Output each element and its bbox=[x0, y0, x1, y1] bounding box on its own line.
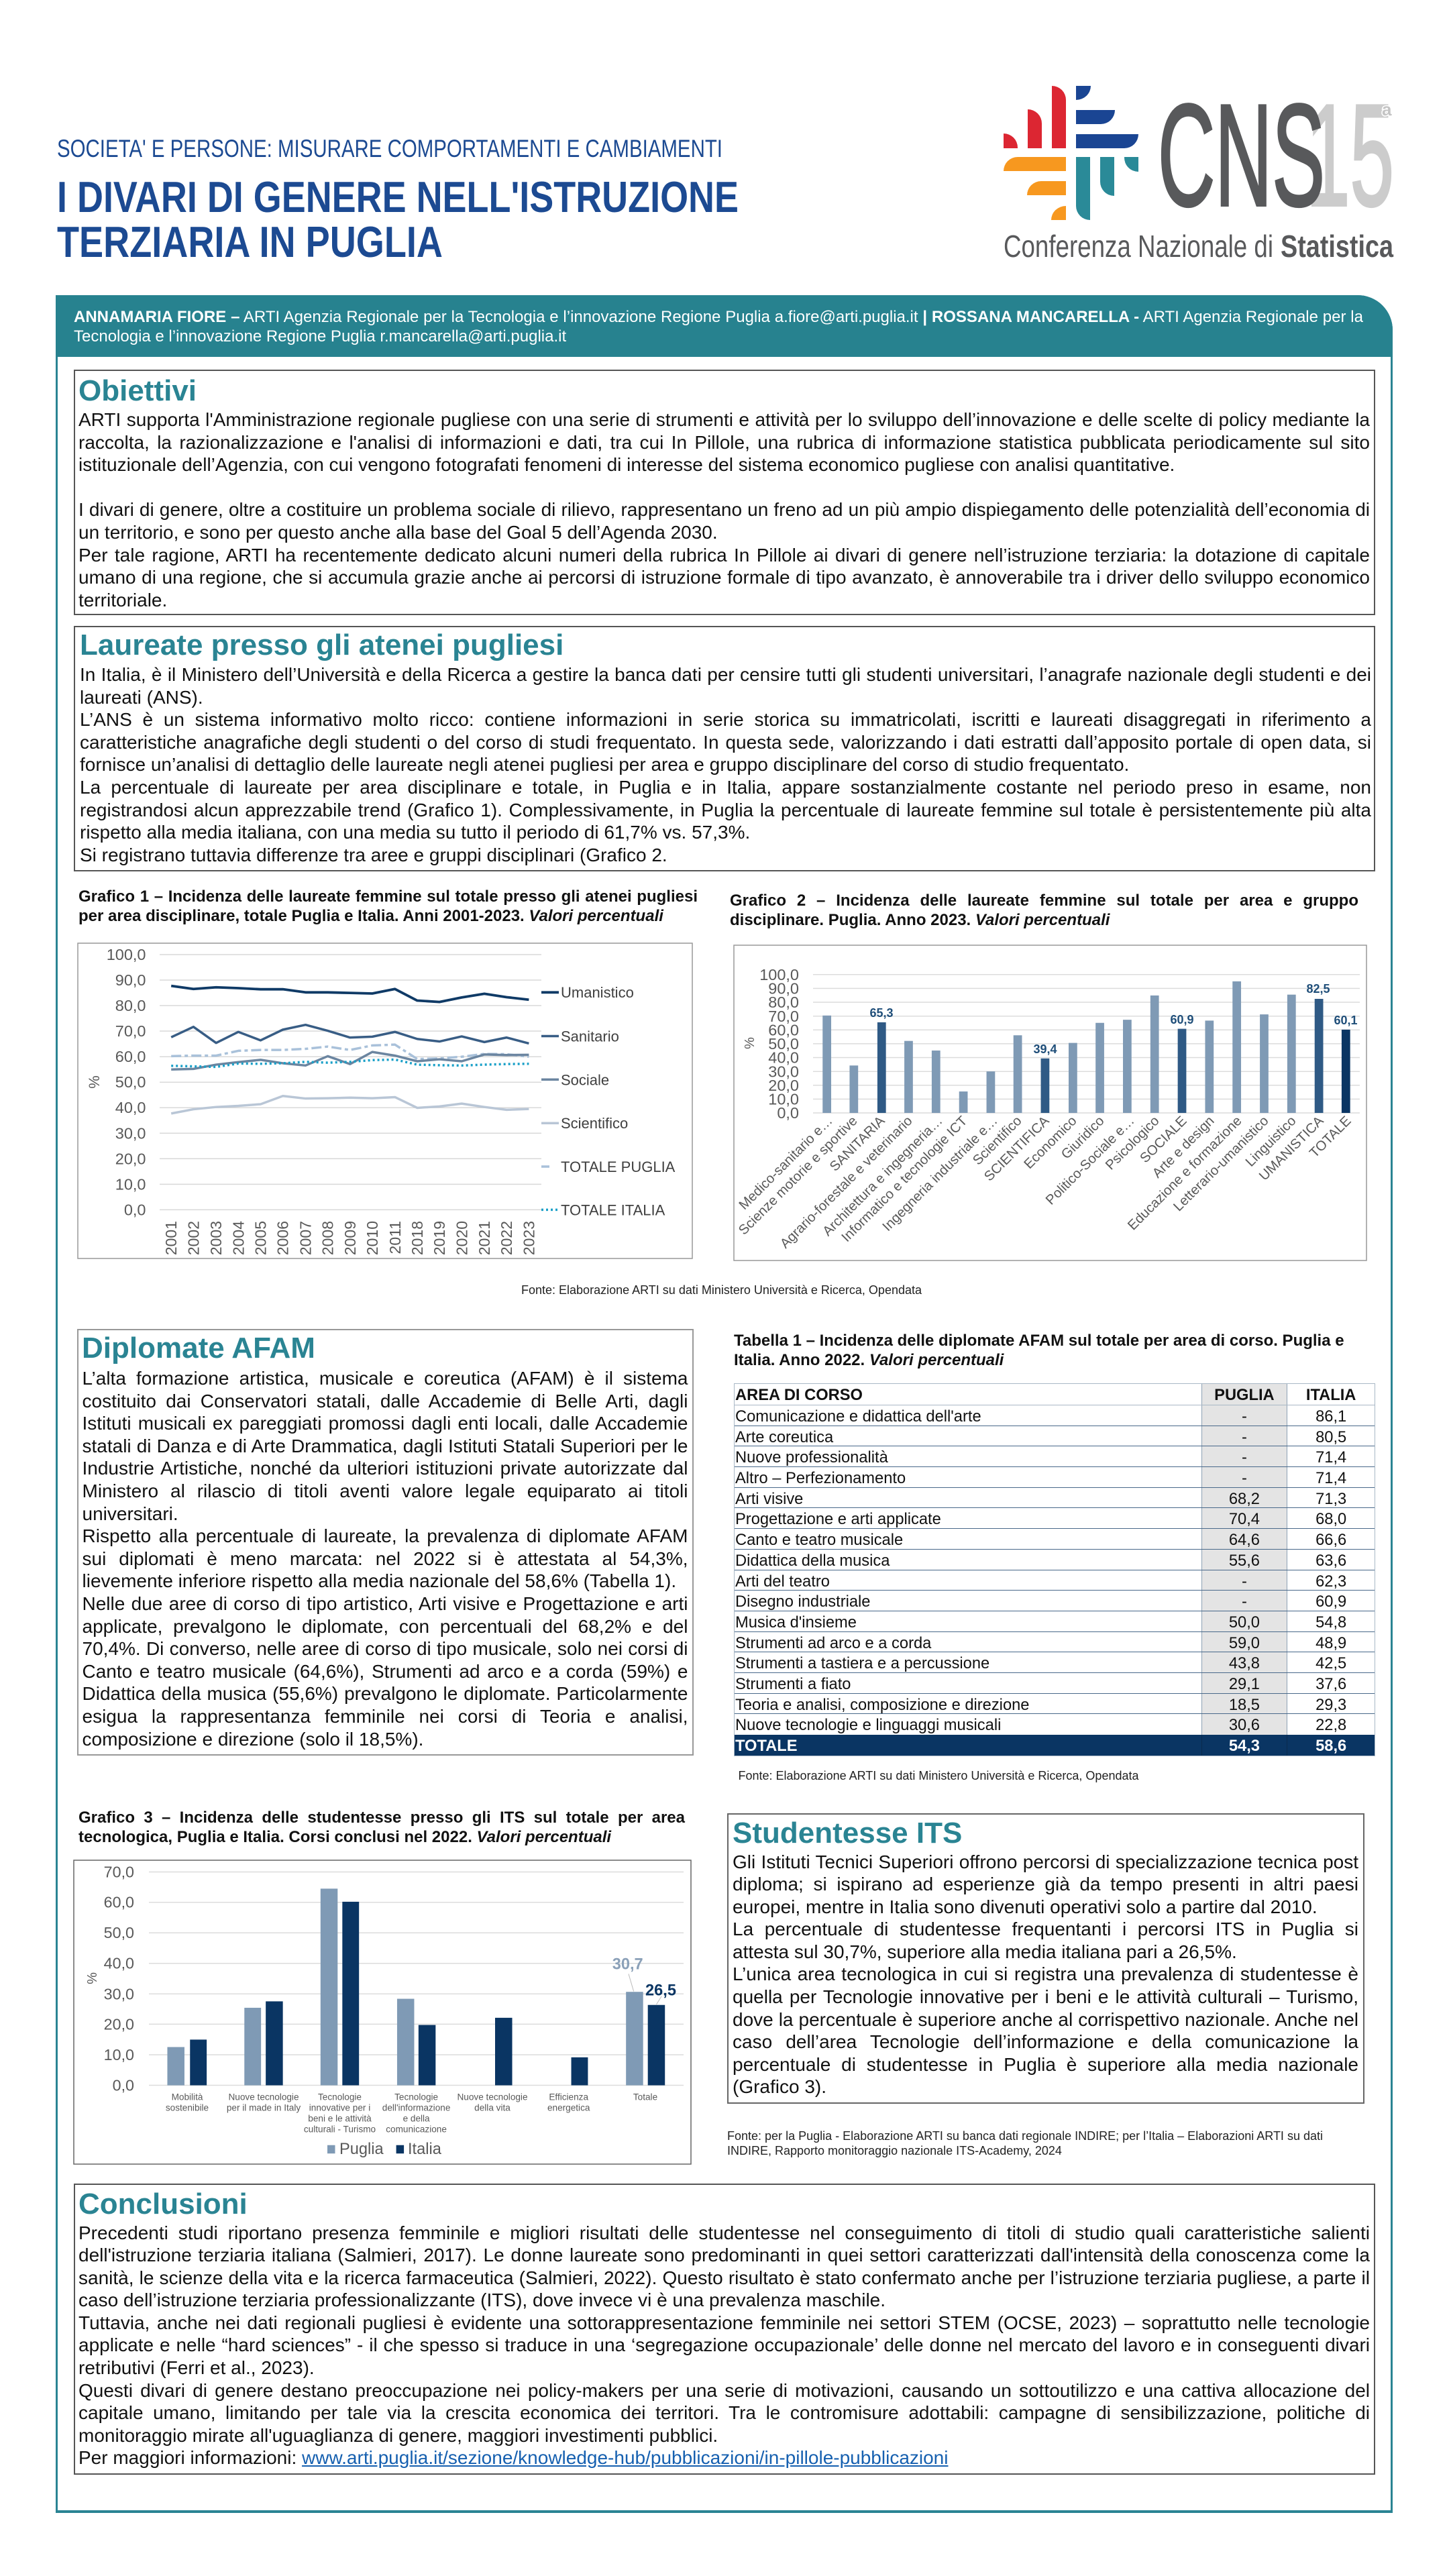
table title: Tabella 1 bbox=[734, 1332, 1344, 1369]
text: Conclusioni body: applicate e nelle “hard sciences” - il che spesso si traduce in una ‘segregazione occupazionale’ delle donne nel mercato del lavoro e in conseguenti divari bbox=[78, 2334, 1370, 2355]
table: Tabella 1: 60,9 bbox=[1316, 1593, 1346, 1611]
main title bbox=[57, 172, 739, 266]
y axis labels: 40,0 bbox=[104, 1955, 134, 1972]
table: Tabella 1: 64,6 bbox=[1229, 1532, 1260, 1549]
y axis labels: 50,0 bbox=[115, 1073, 146, 1091]
table: Tabella 1: 68,2 bbox=[1229, 1491, 1260, 1508]
x axis years: 2021 bbox=[476, 1221, 493, 1255]
text: AFAM body: Didattica della musica (55,6%) prevalgono le diplomate. Particolarmente bbox=[82, 1683, 688, 1704]
text: Conclusioni body: monitoraggio mirate all'uguaglianza di genere, maggiori investimenti pubblici. bbox=[78, 2425, 718, 2446]
chart title: Grafico 2: disciplinare. Puglia. Anno 2023. Valori percentuali bbox=[730, 911, 1110, 929]
x axis category labels: Agrario-forestale e veterinario bbox=[777, 1114, 916, 1251]
x axis category labels: Ingegneria industriale e… bbox=[880, 1114, 1001, 1234]
table: Tabella 1: ITALIA bbox=[1306, 1387, 1356, 1404]
text: AFAM body: lievemente inferiore rispetto alla media nazionale del 58,6% (Tabella 1). bbox=[82, 1570, 676, 1591]
table: Tabella 1: 29,3 bbox=[1316, 1697, 1346, 1714]
icon: blue bars bbox=[1076, 86, 1138, 148]
table: Tabella 1: Strumenti a fiato bbox=[735, 1676, 851, 1693]
chart title: Grafico 1: Grafico 1 – Incidenza delle laureate femmine sul totale presso gli atenei pugliesi bbox=[78, 888, 698, 906]
x axis category labels: Efficienza bbox=[549, 2092, 588, 2102]
text: Obiettivi body: raccolta, la razionalizzazione e l'analisi di informazioni e dati, tra cui In Pillole, una rubrica di informazione statistica pubblicata periodicamente sul sito bbox=[78, 432, 1370, 453]
heading: Studentesse ITS: Studentesse ITS bbox=[733, 1817, 962, 1849]
chart: Grafico 3 grouped bar chart: 26,5 bbox=[645, 1982, 676, 2000]
table: Tabella 1: 54,8 bbox=[1316, 1614, 1346, 1631]
table: Tabella 1: - bbox=[1242, 1593, 1247, 1611]
x axis category labels: Tecnologie bbox=[394, 2092, 438, 2102]
y axis labels: 50,0 bbox=[104, 1924, 134, 1941]
legend: TOTALE PUGLIA bbox=[561, 1159, 676, 1175]
x axis years: 2022 bbox=[498, 1221, 515, 1255]
logo caption: Conferenza Nazionale di bbox=[1004, 229, 1273, 264]
x axis category labels: Medico-sanitario e… bbox=[737, 1114, 836, 1213]
text: ITS body: caso dell’area Tecnologie dell’informazione e della comunicazione la bbox=[733, 2031, 1358, 2052]
x axis category labels: e della bbox=[403, 2114, 430, 2124]
text: AFAM body: sui diplomati è meno marcata: nel 2022 si è attestata al 54,3%, bbox=[82, 1548, 688, 1569]
y axis labels: 80,0 bbox=[115, 997, 146, 1014]
table: Tabella 1: 66,6 bbox=[1316, 1532, 1346, 1549]
x axis years: 2002 bbox=[184, 1221, 202, 1255]
text: ITS body bbox=[733, 1851, 1358, 2097]
y axis labels: 60,0 bbox=[104, 1894, 134, 1911]
x axis category labels: dell'informazione bbox=[382, 2103, 450, 2113]
table: Tabella 1: Nuove tecnologie e linguaggi musicali bbox=[735, 1717, 1001, 1734]
table: Tabella 1: - bbox=[1242, 1408, 1247, 1426]
table: Tabella 1: 71,4 bbox=[1316, 1470, 1346, 1487]
x axis category labels: Totale bbox=[633, 2092, 657, 2102]
text: Obiettivi body: Per tale ragione, ARTI ha recentemente dedicato alcuni numeri della rubrica In Pillole ai divari di genere nell’istruzione terziaria: la dotazione di capitale bbox=[78, 545, 1370, 566]
x axis category labels: Tecnologie bbox=[318, 2092, 362, 2102]
table: Tabella 1: 70,4 bbox=[1229, 1511, 1260, 1528]
value labels: 30,7 bbox=[612, 1956, 643, 1974]
chart: Grafico 3 grouped bar chart bbox=[73, 1860, 692, 2165]
table: Tabella 1: Strumenti ad arco e a corda bbox=[735, 1635, 931, 1652]
main title: TERZIARIA IN PUGLIA bbox=[57, 217, 443, 266]
text: Conclusioni body: capitale umano, limitando per tale via la crescita economica dei territori. Tra le contromisure adottabili: campagne di sensibilizzazione, politiche di bbox=[78, 2402, 1370, 2423]
text: Obiettivi body: istituzionale dell’Agenzia, con cui vengono fotografati fenomeni di interesse del sistema economico pugliese con analisi quantitative. bbox=[78, 454, 1175, 475]
x axis category labels: innovative per i bbox=[309, 2103, 370, 2113]
chart title: Grafico 1: per area disciplinare, totale Puglia e Italia. Anni 2001-2023. Valori percentuali bbox=[78, 907, 663, 925]
text: Laureate body: fornisce un’analisi di dettaglio delle laureate negli atenei pugliesi per area e gruppo disciplinare del corso di studio frequentato. bbox=[80, 754, 1129, 775]
table: Tabella 1 bbox=[734, 1383, 1375, 1756]
logo: CNS 15a Conferenza Nazionale di Statistica bbox=[1004, 74, 1394, 264]
text: Obiettivi body: umano di una regione, che si accumula grazie anche ai percorsi di istruzione formale di tipo avanzato, è annoverabile tra i driver dello sviluppo economico bbox=[78, 567, 1370, 588]
text: Laureate body: laureati (ANS). bbox=[80, 687, 203, 708]
y axis labels: 10,0 bbox=[768, 1091, 799, 1108]
text: ITS body: quella per Tecnologie innovative per i beni e le attività culturali – Turismo, bbox=[733, 1986, 1358, 2007]
value labels: 60,9 bbox=[1170, 1013, 1194, 1026]
table: Tabella 1: Arti del teatro bbox=[735, 1572, 830, 1590]
bars bbox=[822, 981, 1350, 1113]
x axis years: 2018 bbox=[409, 1221, 426, 1255]
text: AFAM body: composizione e direzione (solo il 18,5%). bbox=[82, 1728, 423, 1750]
y axis labels: 30,0 bbox=[104, 1985, 134, 2002]
y axis labels: 20,0 bbox=[768, 1077, 799, 1094]
table: Tabella 1: 62,3 bbox=[1316, 1572, 1346, 1590]
chart title: Grafico 3 bbox=[78, 1809, 686, 1846]
chart title: Grafico 1 bbox=[78, 888, 698, 925]
y axis unit: % bbox=[86, 1075, 103, 1089]
text: Conclusioni body: caso dell’istruzione terziaria professionalizzante (ITS), dove invece vi è una prevalenza maschile. bbox=[78, 2290, 885, 2310]
text: Obiettivi body bbox=[78, 409, 1370, 610]
y axis labels: 20,0 bbox=[115, 1150, 146, 1167]
legend: Sanitario bbox=[561, 1028, 619, 1045]
legend: Umanistico bbox=[561, 984, 634, 1001]
table: Tabella 1: 63,6 bbox=[1316, 1552, 1346, 1570]
y axis unit: % bbox=[85, 1972, 100, 1984]
data lines bbox=[171, 986, 529, 1114]
icon: orange bars bbox=[1004, 157, 1066, 220]
text: Laureate body: registrandosi alcun apprezzabile trend (Grafico 1). Complessivamente, in Puglia la percentuale di laureate femmine sul totale è persistentemente più alta bbox=[80, 800, 1371, 820]
x axis category labels: SCIENTIFICA bbox=[981, 1114, 1053, 1184]
panel: Conclusioni bbox=[74, 2184, 1375, 2475]
icon: teal bars bbox=[1076, 157, 1138, 220]
table: Tabella 1: - bbox=[1242, 1572, 1247, 1590]
source note: Grafici 1 e 2: Fonte: Elaborazione ARTI su dati Ministero Università e Ricerca, Opendata bbox=[521, 1283, 922, 1297]
y axis labels: 100,0 bbox=[759, 966, 799, 983]
x axis category labels: Linguistico bbox=[1243, 1114, 1299, 1170]
table: Tabella 1: 80,5 bbox=[1316, 1429, 1346, 1446]
y axis labels: 70,0 bbox=[104, 1864, 134, 1881]
x axis years: 2001 bbox=[162, 1221, 180, 1255]
x axis category labels bbox=[166, 2092, 657, 2135]
table: Tabella 1: 30,6 bbox=[1229, 1717, 1260, 1734]
heading: Laureate: Laureate presso gli atenei pugliesi bbox=[80, 629, 564, 661]
authors line 1: ANNAMARIA FIORE – ARTI Agenzia Regionale per la Tecnologia e l’innovazione Regione Puglia a.fiore@arti.puglia.it | ROSSANA MANCARELLA - ARTI Agenzia Regionale per la bbox=[74, 308, 1363, 326]
y axis labels: 70,0 bbox=[115, 1022, 146, 1040]
content frame bbox=[56, 295, 1393, 2513]
x axis category labels: Mobilità bbox=[172, 2092, 203, 2102]
panel: Laureate presso gli atenei pugliesi bbox=[74, 626, 1375, 871]
text: AFAM body: Canto e teatro musicale (64,6%), Strumenti ad arco e a corda (59%) e bbox=[82, 1661, 688, 1682]
y axis labels bbox=[104, 1864, 134, 2094]
text: AFAM body: Istituti musicali ex pareggiati promossi dagli enti locali, dalle Accademie bbox=[82, 1413, 688, 1434]
y axis labels: 40,0 bbox=[768, 1049, 799, 1067]
text: Obiettivi body: I divari di genere, oltre a costituire un problema sociale di rilievo, rappresentano un freno ad un più ampio dispiegamento delle potenzialità dell’economia di bbox=[78, 499, 1370, 520]
logo caption: Statistica bbox=[1281, 229, 1393, 264]
authors band bbox=[56, 295, 1393, 357]
text: Conclusioni body: retributivi (Ferri et al., 2023). bbox=[78, 2357, 315, 2378]
y axis labels: 30,0 bbox=[768, 1063, 799, 1080]
y axis unit: % bbox=[743, 1037, 757, 1049]
y axis labels bbox=[107, 946, 146, 1218]
text: Laureate body: caratteristiche anagrafiche degli studenti o del corso di studi frequentato. In questa sede, valorizzando i dati estratti dall’apposito portale di open data, si bbox=[80, 732, 1371, 753]
x axis years: 2019 bbox=[431, 1221, 448, 1255]
authors line 2: Tecnologia e l’innovazione Regione Puglia r.mancarella@arti.puglia.it bbox=[74, 327, 566, 345]
text: ITS body: dove la percentuale è superiore anche al corrispettivo nazionale. Anche nel bbox=[733, 2009, 1358, 2030]
x axis years: 2004 bbox=[229, 1221, 247, 1255]
text: AFAM body: 70,4%. Di converso, nelle aree di corso di tipo musicale, solo nei corsi di bbox=[82, 1638, 688, 1659]
legend: TOTALE ITALIA bbox=[561, 1201, 665, 1218]
x axis years: 2023 bbox=[520, 1221, 537, 1255]
table: Tabella 1: Didattica della musica bbox=[735, 1552, 890, 1570]
table: Tabella 1: - bbox=[1242, 1470, 1247, 1487]
table: Tabella 1: 22,8 bbox=[1316, 1717, 1346, 1734]
x axis years: 2007 bbox=[297, 1221, 314, 1255]
text: Conclusioni body bbox=[78, 2222, 1370, 2468]
value labels: 60,1 bbox=[1334, 1014, 1358, 1027]
y axis labels: 10,0 bbox=[104, 2046, 134, 2063]
table: Tabella 1: - bbox=[1242, 1449, 1247, 1466]
x axis category labels: Arte e design bbox=[1150, 1114, 1218, 1181]
table: Tabella 1: 18,5 bbox=[1229, 1697, 1260, 1714]
heading: Obiettivi: Obiettivi bbox=[78, 374, 197, 407]
x axis category labels: Scienze motorie e sportive bbox=[736, 1114, 861, 1238]
x axis years: 2011 bbox=[386, 1221, 404, 1254]
table: Tabella 1: 48,9 bbox=[1316, 1635, 1346, 1652]
table: Tabella 1: Arti visive bbox=[735, 1491, 803, 1508]
session subtitle: SOCIETA' E PERSONE: MISURARE COMPORTAMENTI E CAMBIAMENTI bbox=[57, 135, 722, 162]
source note: Grafico 3: INDIRE, Rapporto monitoraggio nazionale ITS-Academy, 2024 bbox=[727, 2144, 1062, 2157]
legend: Sociale bbox=[561, 1071, 609, 1088]
x axis category labels: TOTALE bbox=[1307, 1114, 1354, 1161]
text: ITS body: europei, mentre in Italia sono divenuti operativi solo a partire dal 2010. bbox=[733, 1896, 1318, 1917]
x axis category labels: Politico-Sociale e… bbox=[1043, 1114, 1138, 1208]
x axis category labels: culturali - Turismo bbox=[304, 2125, 376, 2135]
text: ITS body: diploma; si ispirano ad esperienze già da tempo presenti in altri paesi bbox=[733, 1874, 1358, 1894]
panel: Diplomate AFAM bbox=[77, 1329, 694, 1756]
chart title: Grafico 3: Grafico 3 – Incidenza delle studentesse presso gli ITS sul totale per area bbox=[78, 1809, 685, 1827]
chart title: Grafico 2: Grafico 2 – Incidenza delle laureate femmine sul totale per area e gruppo bbox=[730, 892, 1358, 910]
y axis labels: 10,0 bbox=[115, 1175, 146, 1193]
value labels: 65,3 bbox=[869, 1006, 894, 1020]
x axis years: 2006 bbox=[274, 1221, 292, 1255]
legend bbox=[541, 984, 676, 1218]
text: Laureate body bbox=[80, 664, 1371, 865]
table: Tabella 1: 50,0 bbox=[1229, 1614, 1260, 1631]
x axis years bbox=[162, 1221, 537, 1255]
value labels bbox=[869, 982, 1358, 1056]
y axis labels: 60,0 bbox=[768, 1021, 799, 1038]
y axis labels: 40,0 bbox=[115, 1099, 146, 1116]
table: Tabella 1: 86,1 bbox=[1316, 1408, 1346, 1426]
y axis labels: 70,0 bbox=[768, 1008, 799, 1025]
table: Tabella 1: Musica d'insieme bbox=[735, 1614, 857, 1631]
y axis labels: 100,0 bbox=[107, 946, 146, 963]
table: Tabella 1: 42,5 bbox=[1316, 1655, 1346, 1672]
y axis labels: 0,0 bbox=[777, 1104, 799, 1122]
chart title: Grafico 2 bbox=[730, 892, 1358, 929]
text: Laureate body: rispetto alla media italiana, con una media su tutto il periodo di 61,7% vs. 57,3%. bbox=[80, 822, 750, 843]
text: ITS body: La percentuale di studentesse frequentanti i percorsi ITS in Puglia si bbox=[733, 1919, 1358, 1939]
text: AFAM body: universitari. bbox=[82, 1503, 178, 1524]
table: Tabella 1: TOTALE bbox=[735, 1737, 798, 1755]
text: ITS body: percentuale di studentesse in Puglia è superiore alla media nazionale bbox=[733, 2054, 1358, 2075]
text: Conclusioni body: sanità, le scienze della vita e la ricerca farmaceutica (Salmieri, 2022). Questo risultato è stato confermato anche per l’istruzione terziaria pugliese, a parte il bbox=[78, 2267, 1370, 2288]
table: Tabella 1: 29,1 bbox=[1229, 1676, 1260, 1693]
text: AFAM body: esigua la rappresentanza femminile nei corsi di Teoria e analisi, bbox=[82, 1706, 688, 1727]
text: Laureate body: L’ANS è un sistema informativo molto ricco: contiene informazioni in serie storica su immatricolati, iscritti e laureati disaggregati in riferimento a bbox=[80, 709, 1371, 730]
table: Tabella 1: PUGLIA bbox=[1214, 1387, 1275, 1404]
legend: Italia bbox=[408, 2141, 442, 2158]
text: AFAM body: L’alta formazione artistica, musicale e coreutica (AFAM) è il sistema bbox=[82, 1368, 688, 1389]
table: Tabella 1: - bbox=[1242, 1429, 1247, 1446]
x axis years: 2010 bbox=[364, 1221, 381, 1255]
x axis category labels: comunicazione bbox=[386, 2125, 447, 2135]
text: Conclusioni body: Precedenti studi riportano presenza femminile e migliori risultati delle studentesse nel conseguimento di titoli di studio quali caratteristiche salienti bbox=[78, 2222, 1370, 2243]
x axis years: 2003 bbox=[207, 1221, 225, 1255]
text: Laureate body: Si registrano tuttavia differenze tra aree e gruppi disciplinari (Grafico 2. bbox=[80, 845, 667, 865]
text: ITS body: Gli Istituti Tecnici Superiori offrono percorsi di specializzazione tecnica post bbox=[733, 1851, 1358, 1872]
x axis years: 2008 bbox=[319, 1221, 337, 1255]
x axis category labels: Scientifico bbox=[970, 1114, 1025, 1168]
legend bbox=[327, 2141, 442, 2158]
table: Tabella 1: 71,3 bbox=[1316, 1491, 1346, 1508]
text: Obiettivi body: territoriale. bbox=[78, 590, 167, 610]
table: Tabella 1: Nuove professionalità bbox=[735, 1449, 888, 1466]
text: Obiettivi body: un territorio, e sono per questo anche alla base del Goal 5 dell’Agenda 2030. bbox=[78, 522, 718, 543]
chart: Grafico 2 bar chart bbox=[733, 945, 1367, 1261]
y axis labels: 0,0 bbox=[113, 2077, 134, 2094]
panel: Obiettivi bbox=[74, 370, 1375, 615]
icon: red bars bbox=[1004, 86, 1066, 148]
table: Tabella 1: 58,6 bbox=[1316, 1737, 1346, 1755]
heading: Diplomate AFAM: Diplomate AFAM bbox=[82, 1332, 315, 1364]
x axis category labels: Nuove tecnologie bbox=[228, 2092, 299, 2102]
y axis labels bbox=[759, 966, 799, 1122]
heading: Conclusioni: Conclusioni bbox=[78, 2187, 248, 2220]
x axis category labels: SANITARIA bbox=[827, 1114, 888, 1175]
x axis years: 2020 bbox=[453, 1221, 470, 1255]
x axis category labels: UMANISTICA bbox=[1256, 1114, 1327, 1183]
table: Tabella 1: Canto e teatro musicale bbox=[735, 1532, 903, 1549]
value labels: 82,5 bbox=[1306, 982, 1330, 996]
text: ITS body: L’unica area tecnologica in cui si registra una prevalenza di studentesse è bbox=[733, 1964, 1358, 1984]
table: Tabella 1: 68,0 bbox=[1316, 1511, 1346, 1528]
x axis category labels: beni e le attività bbox=[308, 2114, 372, 2124]
y axis labels: 20,0 bbox=[104, 2015, 134, 2033]
text: AFAM body: statali di Danza e di Arte Drammatica, dagli Istituti Statali Superiori per le bbox=[82, 1436, 688, 1456]
x axis category labels bbox=[736, 1114, 1354, 1251]
panel: Studentesse ITS bbox=[727, 1813, 1364, 2104]
x axis category labels: Giuridico bbox=[1059, 1114, 1108, 1162]
text: Laureate body: La percentuale di laureate per area disciplinare e totale, in Puglia e in Italia, appare sostanzialmente costante nel periodo preso in esame, non bbox=[80, 777, 1371, 798]
y axis labels: 90,0 bbox=[115, 971, 146, 989]
table: Tabella 1: Comunicazione e didattica dell'arte bbox=[735, 1408, 981, 1426]
table: Tabella 1: 54,3 bbox=[1229, 1737, 1260, 1755]
table: Tabella 1: 43,8 bbox=[1229, 1655, 1260, 1672]
y axis labels: 60,0 bbox=[115, 1048, 146, 1065]
table: Tabella 1: 37,6 bbox=[1316, 1676, 1346, 1693]
source note: Grafico 3: Fonte: per la Puglia - Elaborazione ARTI su banca dati regionale INDIRE; per l’Italia – Elaborazioni ARTI su dati bbox=[727, 2129, 1323, 2143]
table: Tabella 1: Disegno industriale bbox=[735, 1593, 870, 1611]
table: Tabella 1: Progettazione e arti applicate bbox=[735, 1511, 941, 1528]
legend: Scientifico bbox=[561, 1115, 628, 1132]
text: Obiettivi body: ARTI supporta l'Amministrazione regionale pugliese con una serie di strumenti e attività per lo sviluppo dell’innovazione e delle scelte di policy mediante la bbox=[78, 409, 1370, 430]
text: AFAM body: applicate, prevalgono le diplomate, con percentuali del 68,2% e del bbox=[82, 1616, 688, 1637]
table: Tabella 1: 55,6 bbox=[1229, 1552, 1260, 1570]
text: Conclusioni body: dell'istruzione terziaria italiana (Salmieri, 2017). Le donne laureate sono predominanti in quei settori caratterizzati dall'intensità della conoscenza come la bbox=[78, 2245, 1370, 2265]
table: Tabella 1: 71,4 bbox=[1316, 1449, 1346, 1466]
x axis category labels: sostenibile bbox=[166, 2103, 209, 2113]
x axis category labels: per il made in Italy bbox=[227, 2103, 301, 2113]
table: Tabella 1: Teoria e analisi, composizione e direzione bbox=[735, 1697, 1029, 1714]
text: Conclusioni body: Tuttavia, anche nei dati regionali pugliesi è evidente una sottorappresentazione femminile nei settori STEM (OCSE, 2023) – soprattutto nelle tecnologie bbox=[78, 2312, 1370, 2333]
text: ITS body: attesta sul 30,7%, superiore alla media italiana pari a 26,5%. bbox=[733, 1941, 1237, 1962]
x axis years: 2005 bbox=[252, 1221, 270, 1255]
header title block bbox=[57, 135, 739, 266]
x axis years: 2009 bbox=[341, 1221, 359, 1255]
text: AFAM body: Ministero al rilascio di titoli aventi valore legale equiparato ai titoli bbox=[82, 1481, 688, 1501]
text: ITS body: (Grafico 3). bbox=[733, 2076, 826, 2097]
text: AFAM body: costituito dai Conservatori statali, dalle Accademie di Belle Arti, dagli bbox=[82, 1391, 688, 1411]
x axis category labels: energetica bbox=[547, 2103, 590, 2113]
x axis category labels: Letterario-umanistico bbox=[1171, 1114, 1272, 1214]
text: AFAM body bbox=[82, 1368, 688, 1750]
x axis category labels: Informatico e tecnologie ICT bbox=[839, 1114, 971, 1245]
y axis labels: 0,0 bbox=[124, 1201, 146, 1218]
y axis labels: 90,0 bbox=[768, 980, 799, 998]
source note: Grafico 3 bbox=[727, 2129, 1323, 2157]
text: AFAM body: Nelle due aree di corso di tipo artistico, Arti visive e Progettazione e arti bbox=[82, 1593, 688, 1614]
text: Conclusioni body: Per maggiori informazioni: www.arti.puglia.it/sezione/knowledge-hub/pubblicazioni/in-pillole-pubblicazioni bbox=[78, 2447, 948, 2468]
text: Laureate body: In Italia, è il Ministero dell’Università e della Ricerca a gestire la banca dati per censire tutti gli studenti universitari, l’anagrafe nazionale degli studenti e dei bbox=[80, 664, 1371, 685]
x axis category labels: Architettura e ingegneria… bbox=[820, 1114, 946, 1239]
x axis category labels: Psicologico bbox=[1103, 1114, 1163, 1173]
text: AFAM body: Industrie Artistiche, nonché da ulteriori istituzioni private autorizzate dal bbox=[82, 1458, 688, 1479]
x axis category labels: Educazione e formazione bbox=[1125, 1114, 1245, 1233]
text: AFAM body: Rispetto alla percentuale di laureate, la prevalenza di diplomate AFAM bbox=[82, 1525, 688, 1546]
bars bbox=[167, 1888, 665, 2086]
y axis labels: 80,0 bbox=[768, 994, 799, 1011]
table: Tabella 1: Altro – Perfezionamento bbox=[735, 1470, 906, 1487]
y axis labels: 50,0 bbox=[768, 1035, 799, 1053]
y axis labels: 30,0 bbox=[115, 1124, 146, 1142]
value labels: 39,4 bbox=[1033, 1042, 1057, 1056]
table title: Tabella 1: Tabella 1 – Incidenza delle diplomate AFAM sul totale per area di corso. Puglia e bbox=[734, 1332, 1344, 1350]
main title: I DIVARI DI GENERE NELL'ISTRUZIONE bbox=[57, 172, 739, 221]
chart title: Grafico 3: tecnologica, Puglia e Italia. Corsi conclusi nel 2022. Valori percentuali bbox=[78, 1828, 611, 1846]
source note: Tabella 1: Fonte: Elaborazione ARTI su dati Ministero Università e Ricerca, Opendata bbox=[738, 1769, 1139, 1782]
logo wordmark: a bbox=[1382, 99, 1392, 119]
table: Tabella 1: Strumenti a tastiera e a percussione bbox=[735, 1655, 989, 1672]
legend: Puglia bbox=[339, 2141, 384, 2158]
table: Tabella 1: AREA DI CORSO bbox=[735, 1387, 863, 1404]
table title: Tabella 1: Italia. Anno 2022. Valori percentuali bbox=[734, 1351, 1004, 1369]
x axis category labels: Economico bbox=[1022, 1114, 1080, 1172]
table: Tabella 1: Arte coreutica bbox=[735, 1429, 833, 1446]
chart: Grafico 1 line chart bbox=[77, 943, 693, 1259]
table: Tabella 1: 59,0 bbox=[1229, 1635, 1260, 1652]
x axis category labels: Nuove tecnologie bbox=[457, 2092, 528, 2102]
text: Conclusioni body: Questi divari di genere destano preoccupazione nei policy-makers per una serie di motivazioni, causando un sottoutilizzo e una cattiva allocazione del bbox=[78, 2380, 1370, 2401]
x axis category labels: della vita bbox=[474, 2103, 511, 2113]
x axis category labels: SOCIALE bbox=[1137, 1114, 1190, 1166]
